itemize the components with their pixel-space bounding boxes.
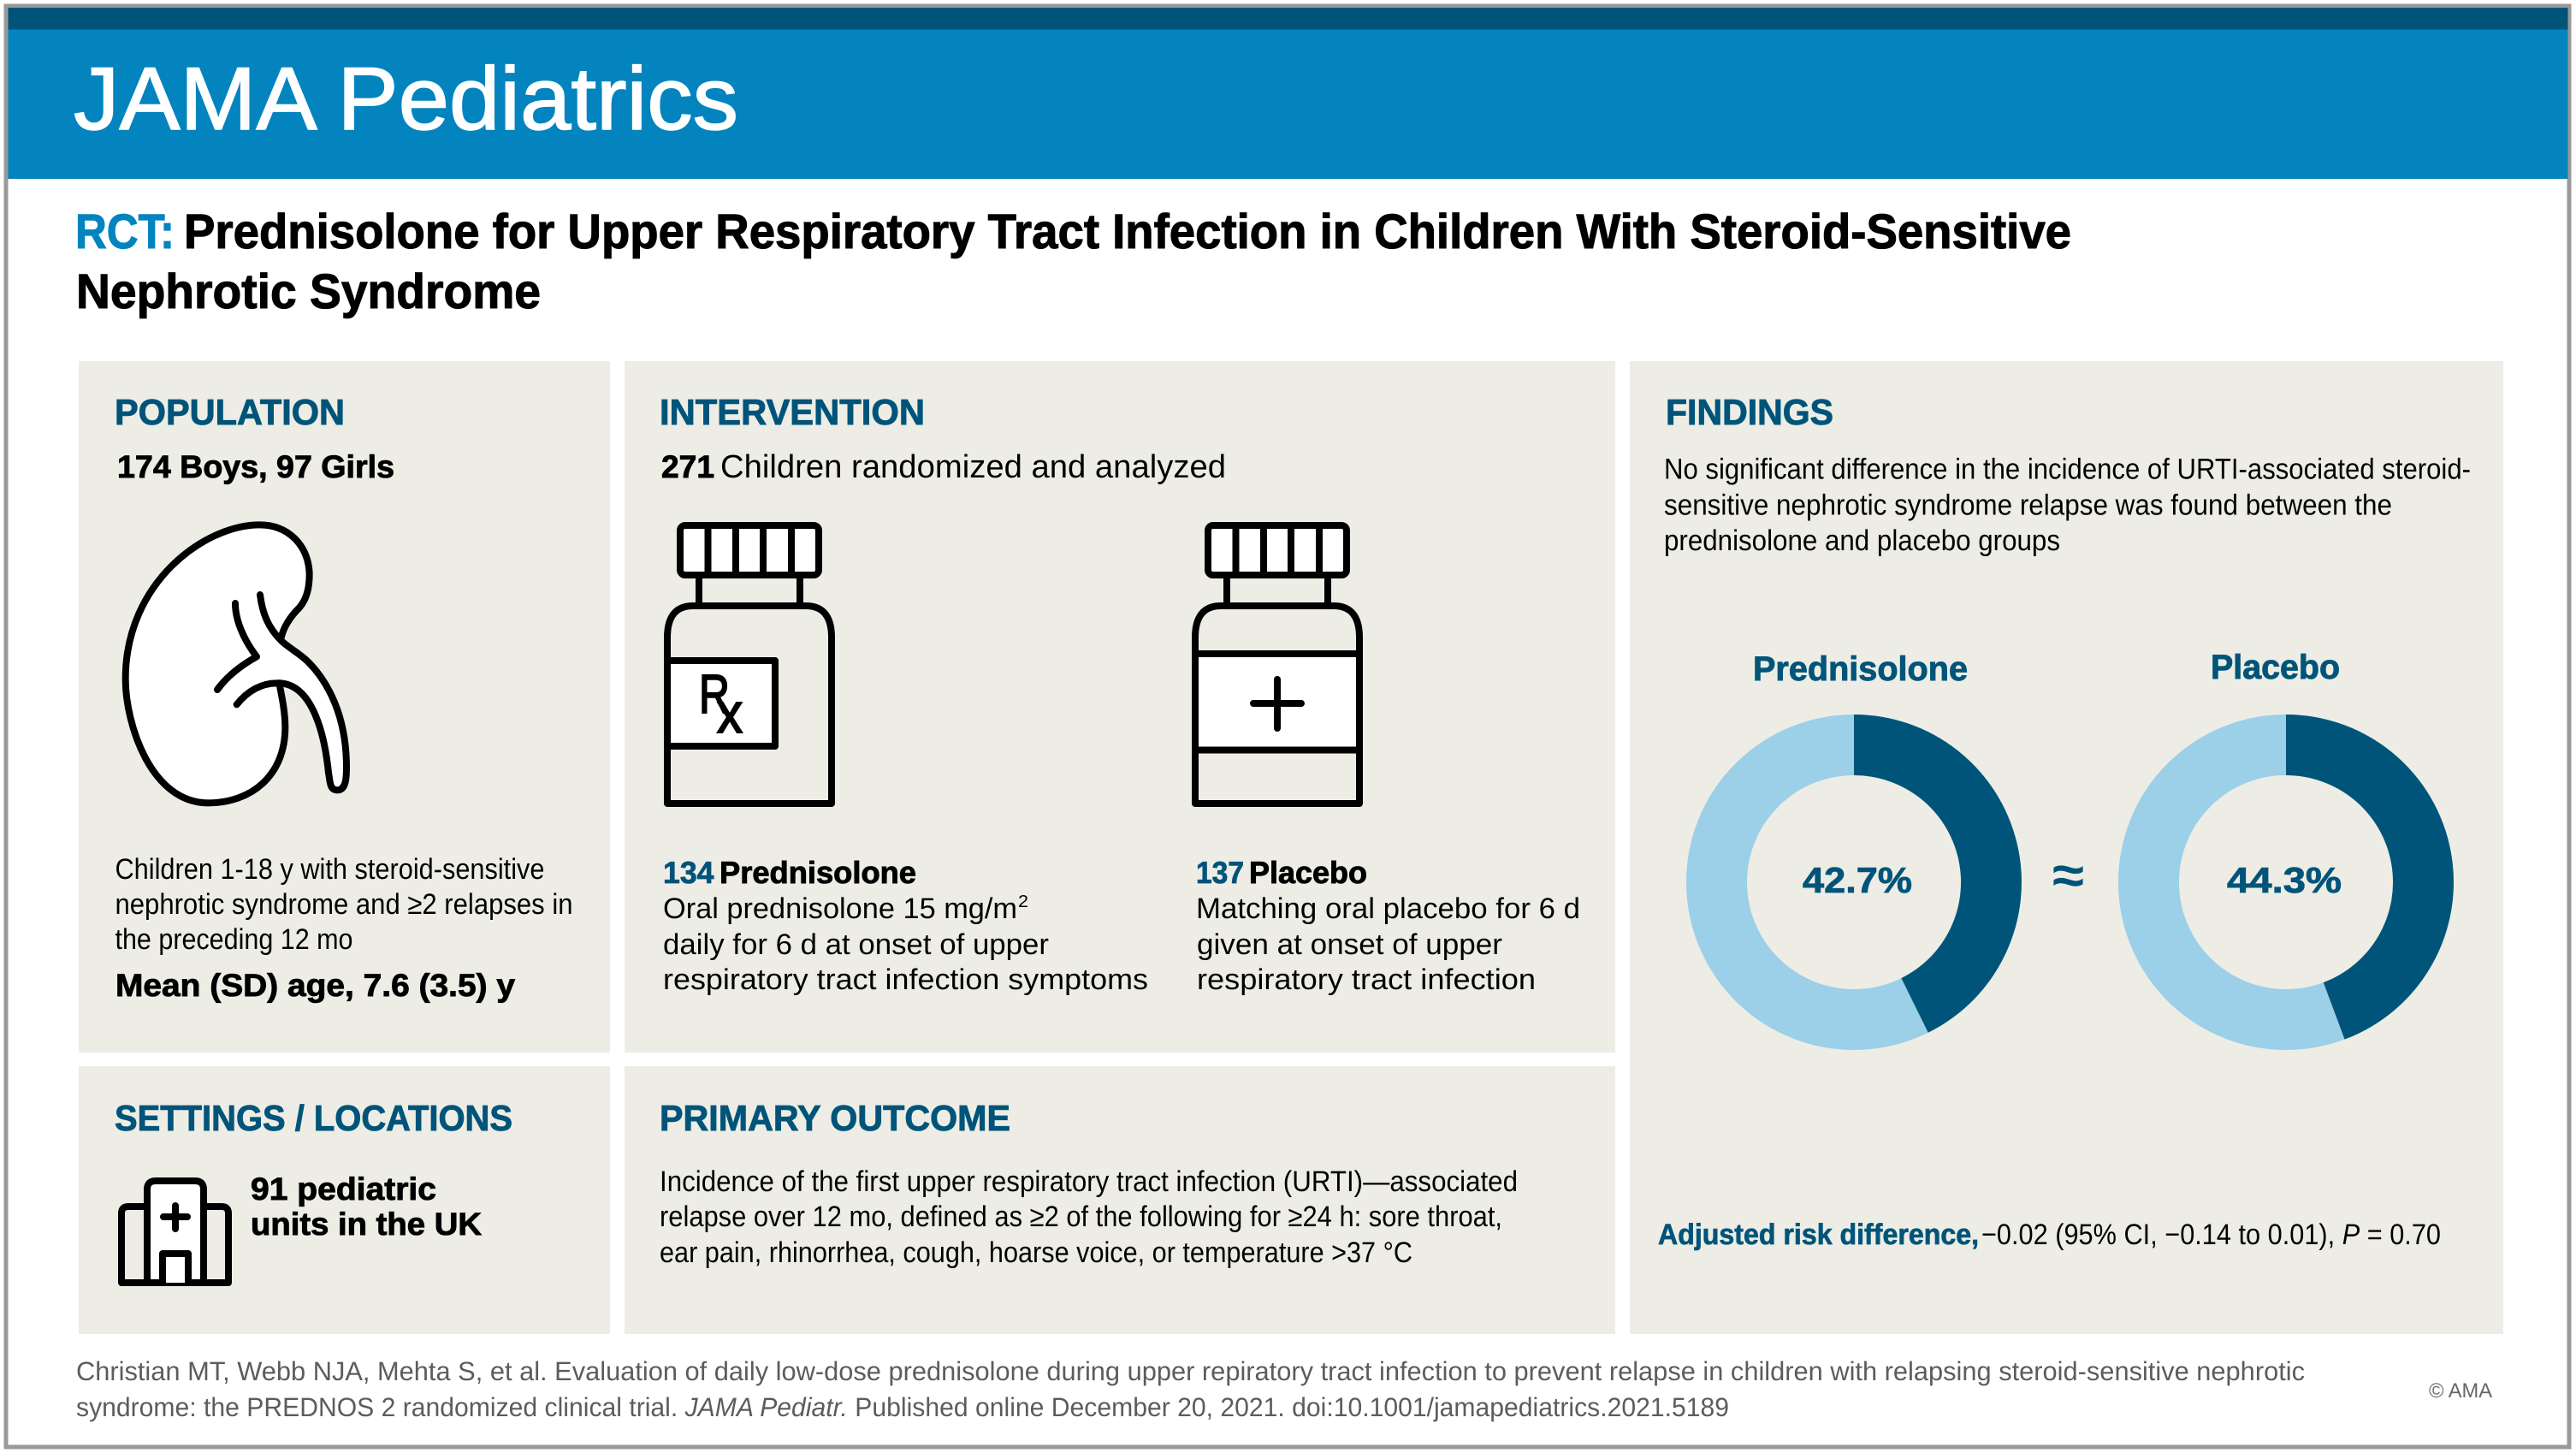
settings text: 91 pediatric bbox=[251, 1171, 436, 1207]
findings heading: FINDINGS bbox=[1666, 392, 1833, 432]
citation bbox=[76, 1356, 2305, 1422]
population heading: POPULATION bbox=[115, 392, 345, 432]
findings text bbox=[1664, 454, 2471, 557]
prednisolone arm text: 2 bbox=[1018, 893, 1028, 911]
panel: intervention bbox=[625, 361, 1615, 1053]
panel: settings and locations bbox=[79, 1066, 610, 1334]
main heading: RCT: bbox=[75, 205, 175, 259]
icon: placebo bottle bbox=[1195, 525, 1359, 804]
header banner bbox=[9, 8, 2568, 179]
panel: population bbox=[79, 361, 610, 1053]
primary outcome text: relapse over 12 mo, defined as ≥2 of the following for ≥24 h: sore throat, bbox=[660, 1201, 1502, 1233]
population description: the preceding 12 mo bbox=[115, 923, 352, 956]
primary outcome heading: PRIMARY OUTCOME bbox=[660, 1098, 1010, 1138]
findings text: No significant difference in the incidence of URTI-associated steroid- bbox=[1664, 454, 2471, 486]
population description bbox=[115, 853, 573, 956]
adjusted risk difference: Adjusted risk difference, bbox=[1658, 1219, 1979, 1251]
icon: prednisolone bottle bbox=[667, 525, 832, 804]
settings heading: SETTINGS / LOCATIONS bbox=[115, 1098, 512, 1138]
randomized count: Children randomized and analyzed bbox=[720, 449, 1226, 485]
main heading: Nephrotic Syndrome bbox=[76, 264, 541, 319]
adjusted risk difference bbox=[1658, 1219, 2441, 1251]
donut chart: prednisolone 42.7% bbox=[1716, 715, 2022, 1033]
primary outcome text bbox=[660, 1165, 1518, 1269]
main heading bbox=[75, 205, 2071, 319]
primary outcome text: ear pain, rhinorrhea, cough, hoarse voice, or temperature >37 °C bbox=[660, 1237, 1412, 1269]
donut chart: placebo 44.3% bbox=[2149, 715, 2454, 1040]
copyright: © AMA bbox=[2429, 1379, 2492, 1403]
donut label: placebo: Placebo bbox=[2211, 649, 2340, 686]
panel: findings bbox=[1630, 361, 2503, 1334]
placebo arm text: given at onset of upper bbox=[1197, 928, 1502, 961]
prednisolone arm text: daily for 6 d at onset of upper bbox=[663, 928, 1049, 961]
settings text bbox=[251, 1171, 482, 1242]
settings text: units in the UK bbox=[251, 1207, 482, 1242]
primary outcome text: Incidence of the first upper respiratory tract infection (URTI)—associated bbox=[660, 1165, 1518, 1198]
findings text: prednisolone and placebo groups bbox=[1664, 525, 2060, 557]
placebo arm text: 137 bbox=[1196, 855, 1244, 890]
adjusted risk difference: −0.02 (95% CI, −0.14 to 0.01), P = 0.70 bbox=[1981, 1219, 2441, 1251]
placebo arm text bbox=[1196, 855, 1580, 996]
donut chart: placebo 44.3%: 44.3% bbox=[2227, 860, 2342, 900]
citation: Christian MT, Webb NJA, Mehta S, et al. Evaluation of daily low-dose prednisolone during upper repiratory tract infection to prevent relapse in children with relapsing steroid-sensitive nephrotic bbox=[76, 1356, 2305, 1386]
prednisolone arm text: 134 bbox=[663, 855, 714, 890]
icon: prednisolone bottle: x bbox=[717, 681, 743, 744]
icon: prednisolone bottle: R bbox=[699, 663, 730, 725]
prednisolone arm text: respiratory tract infection symptoms bbox=[663, 964, 1148, 996]
intervention heading: INTERVENTION bbox=[660, 392, 925, 432]
donut chart: prednisolone 42.7%: 42.7% bbox=[1803, 860, 1912, 900]
mean age: Mean (SD) age, 7.6 (3.5) y bbox=[115, 968, 515, 1003]
prednisolone arm text: Prednisolone bbox=[720, 855, 916, 890]
population description: Children 1-18 y with steroid-sensitive bbox=[115, 853, 544, 886]
prednisolone arm text: Oral prednisolone 15 mg/m bbox=[663, 893, 1017, 925]
placebo arm text: Matching oral placebo for 6 d bbox=[1196, 893, 1580, 925]
main heading: Prednisolone for Upper Respiratory Tract Infection in Children With Steroid-Sensitive bbox=[184, 205, 2071, 259]
randomized count: 271 bbox=[661, 449, 714, 484]
placebo arm text: Placebo bbox=[1249, 855, 1367, 890]
panel: primary outcome bbox=[625, 1066, 1615, 1334]
population counts: 174 Boys, 97 Girls bbox=[117, 449, 394, 484]
findings text: sensitive nephrotic syndrome relapse was found between the bbox=[1664, 489, 2392, 522]
donut label: prednisolone: Prednisolone bbox=[1753, 650, 1968, 688]
citation: syndrome: the PREDNOS 2 randomized clinical trial. JAMA Pediatr. Published online December 20, 2021. doi:10.1001/jamapediatrics.2021.5189 bbox=[76, 1392, 1729, 1422]
prednisolone arm text bbox=[663, 855, 1148, 996]
approximately equal symbol: ≈ bbox=[2052, 846, 2084, 905]
placebo arm text: respiratory tract infection bbox=[1197, 964, 1536, 996]
journal title: JAMA Pediatrics bbox=[74, 50, 738, 149]
icon: hospital bbox=[121, 1181, 228, 1283]
icon: kidney bbox=[126, 525, 346, 803]
population description: nephrotic syndrome and ≥2 relapses in bbox=[115, 888, 573, 921]
